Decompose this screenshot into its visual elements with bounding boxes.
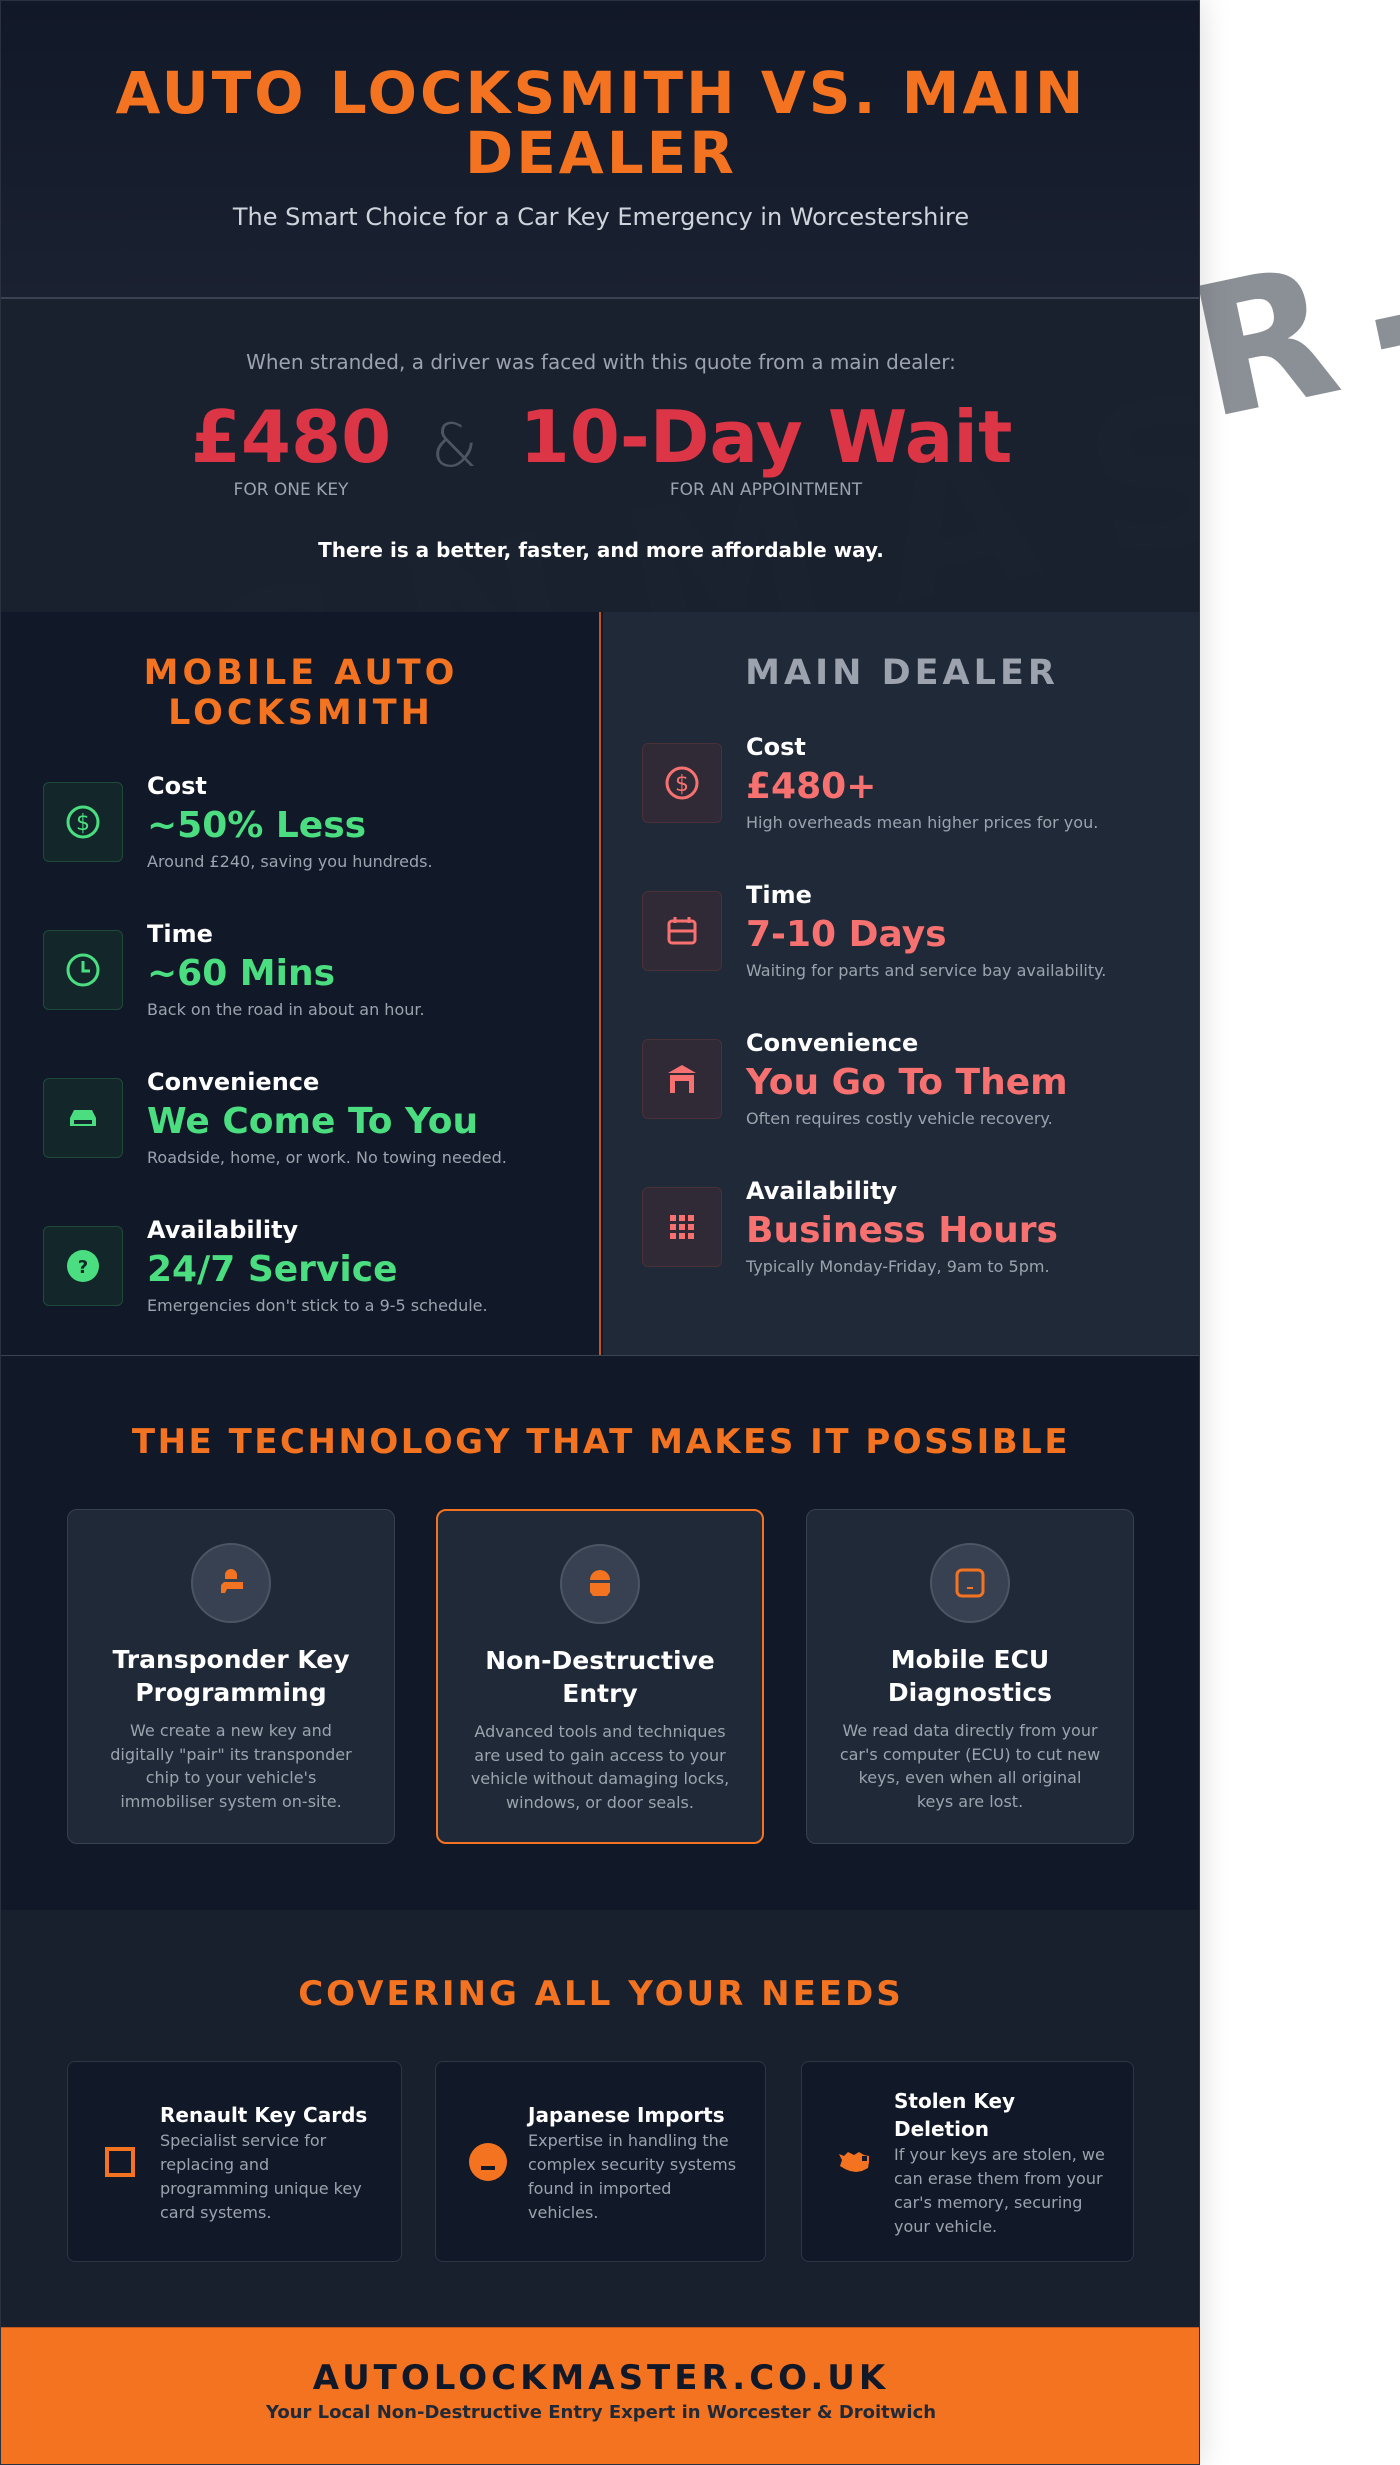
row: availability: Availability [147,1216,298,1244]
card: non-destructive: windows, or door seals. [506,1792,694,1812]
card: transponder: chip to your vehicle's [146,1768,316,1787]
row: cost: Cost [746,733,806,761]
title [116,59,1086,187]
card: renault [67,2061,402,2262]
card: stolen [801,2061,1134,2262]
card: non-destructive: are used to gain access to your [474,1746,726,1764]
subtitle: The Smart Choice for a Car Key Emergency in Worcestershire [233,203,969,231]
stat: price: FOR ONE KEY [234,480,348,500]
card: japanese: Japanese Imports [528,2102,725,2126]
row: time: Time [147,920,213,948]
panel: needs [1,1910,1201,2327]
footer brand: AUTOLOCKMASTER.CO.UK [313,2358,889,2398]
row: cost: High overheads mean higher prices for you. [746,813,1098,832]
heading: THE TECHNOLOGY THAT MAKES IT POSSIBLE [132,1422,1070,1462]
heading: COVERING ALL YOUR NEEDS [298,1974,904,2014]
row: cost: £480+ [746,766,876,807]
row: time [43,920,425,1019]
footer [1,2327,1201,2465]
heading: LOCKSMITH [168,693,434,733]
stats panel [1,299,1201,612]
title: DEALER [465,119,737,187]
card: stolen: If your keys are stolen, we can erase them from your car's memory, securing your vehicle. [894,2144,1105,2236]
panel: technology [1,1356,1201,1910]
ampersand: & [431,411,478,481]
row: availability [642,1177,1058,1276]
row: convenience: Convenience [746,1029,918,1057]
heading: MAIN DEALER [745,653,1059,693]
card: stolen: Stolen Key [894,2088,1015,2112]
row: time: 7-10 Days [746,914,947,955]
row: cost: $ [76,811,90,836]
card: transponder [67,1509,395,1844]
card: ECU: Mobile ECU Diagnostics [888,1645,1052,1707]
card: ECU: We read data directly from your [842,1721,1098,1740]
row: time [642,881,1106,980]
card: transponder: We create a new key and [130,1721,332,1740]
card: non-destructive: vehicle without damaging locks, [471,1769,729,1788]
row: convenience: Often requires costly vehicle recovery. [746,1109,1053,1128]
row: cost [642,733,1098,832]
header [1,1,1201,299]
row: availability: Business Hours [746,1210,1058,1251]
row: availability [43,1216,488,1315]
row: convenience: You Go To Them [746,1062,1068,1103]
panel: mobile locksmith [1,612,601,1355]
card: transponder: digitally "pair" its transponder [110,1744,352,1764]
card: japanese: Expertise in handling the complex security systems found in imported vehicles. [528,2130,736,2222]
card: transponder: immobiliser system on-site. [120,1792,342,1810]
row: time: Back on the road in about an hour. [147,1000,425,1019]
card: non-destructive: Advanced tools and techniques [474,1722,726,1741]
row: availability: Availability [746,1177,897,1205]
stat: price: £480 [191,395,391,479]
row: convenience [43,1068,507,1167]
row: convenience [642,1029,1068,1128]
row: cost: Around £240, saving you hundreds. [147,852,433,871]
row: time: Waiting for parts and service bay availability. [746,961,1106,980]
card: ECU: keys, even when all original [859,1768,1081,1787]
row: convenience: Convenience [147,1068,319,1096]
card: stolen: Deletion [894,2116,989,2140]
intro text: When stranded, a driver was faced with this quote from a main dealer: [246,350,956,374]
card: ECU: car's computer (ECU) to cut new [840,1744,1100,1764]
stat: wait: FOR AN APPOINTMENT [670,480,862,500]
row: cost: ~50% Less [147,805,366,846]
footer tagline: Your Local Non-Destructive Entry Expert in Worcester & Droitwich [266,2402,936,2423]
row: convenience: Roadside, home, or work. No towing needed. [147,1148,507,1167]
panel: comparison [1,612,1201,1356]
card: transponder: Transponder Key Programming [112,1645,350,1707]
heading [144,653,458,733]
card: renault: Renault Key Cards [160,2102,367,2126]
row: cost [43,772,433,871]
stat: wait: 10-Day Wait [520,395,1012,479]
row: availability: Typically Monday-Friday, 9am to 5pm. [746,1257,1050,1276]
row: availability: 24/7 Service [147,1249,398,1290]
heading: MOBILE AUTO [144,653,458,693]
row: availability: Emergencies don't stick to a 9-5 schedule. [147,1296,488,1315]
card: ECU [806,1509,1134,1844]
row: convenience: We Come To You [147,1101,478,1142]
row: time: ~60 Mins [147,953,335,994]
panel: main dealer [603,612,1201,1355]
row: availability: ? [78,1257,88,1278]
tagline: There is a better, faster, and more affordable way. [318,538,884,562]
card: ECU: keys are lost. [917,1792,1023,1810]
card: renault: Specialist service for replacing and programming unique key card systems. [160,2130,362,2222]
card: japanese [435,2061,766,2262]
row: cost: Cost [147,772,207,800]
card: non-destructive: Non-Destructive Entry [485,1646,715,1708]
title: AUTO LOCKSMITH VS. MAIN [116,59,1086,127]
row: cost: $ [675,772,689,797]
card: non-destructive [436,1509,764,1844]
row: time: Time [746,881,812,909]
